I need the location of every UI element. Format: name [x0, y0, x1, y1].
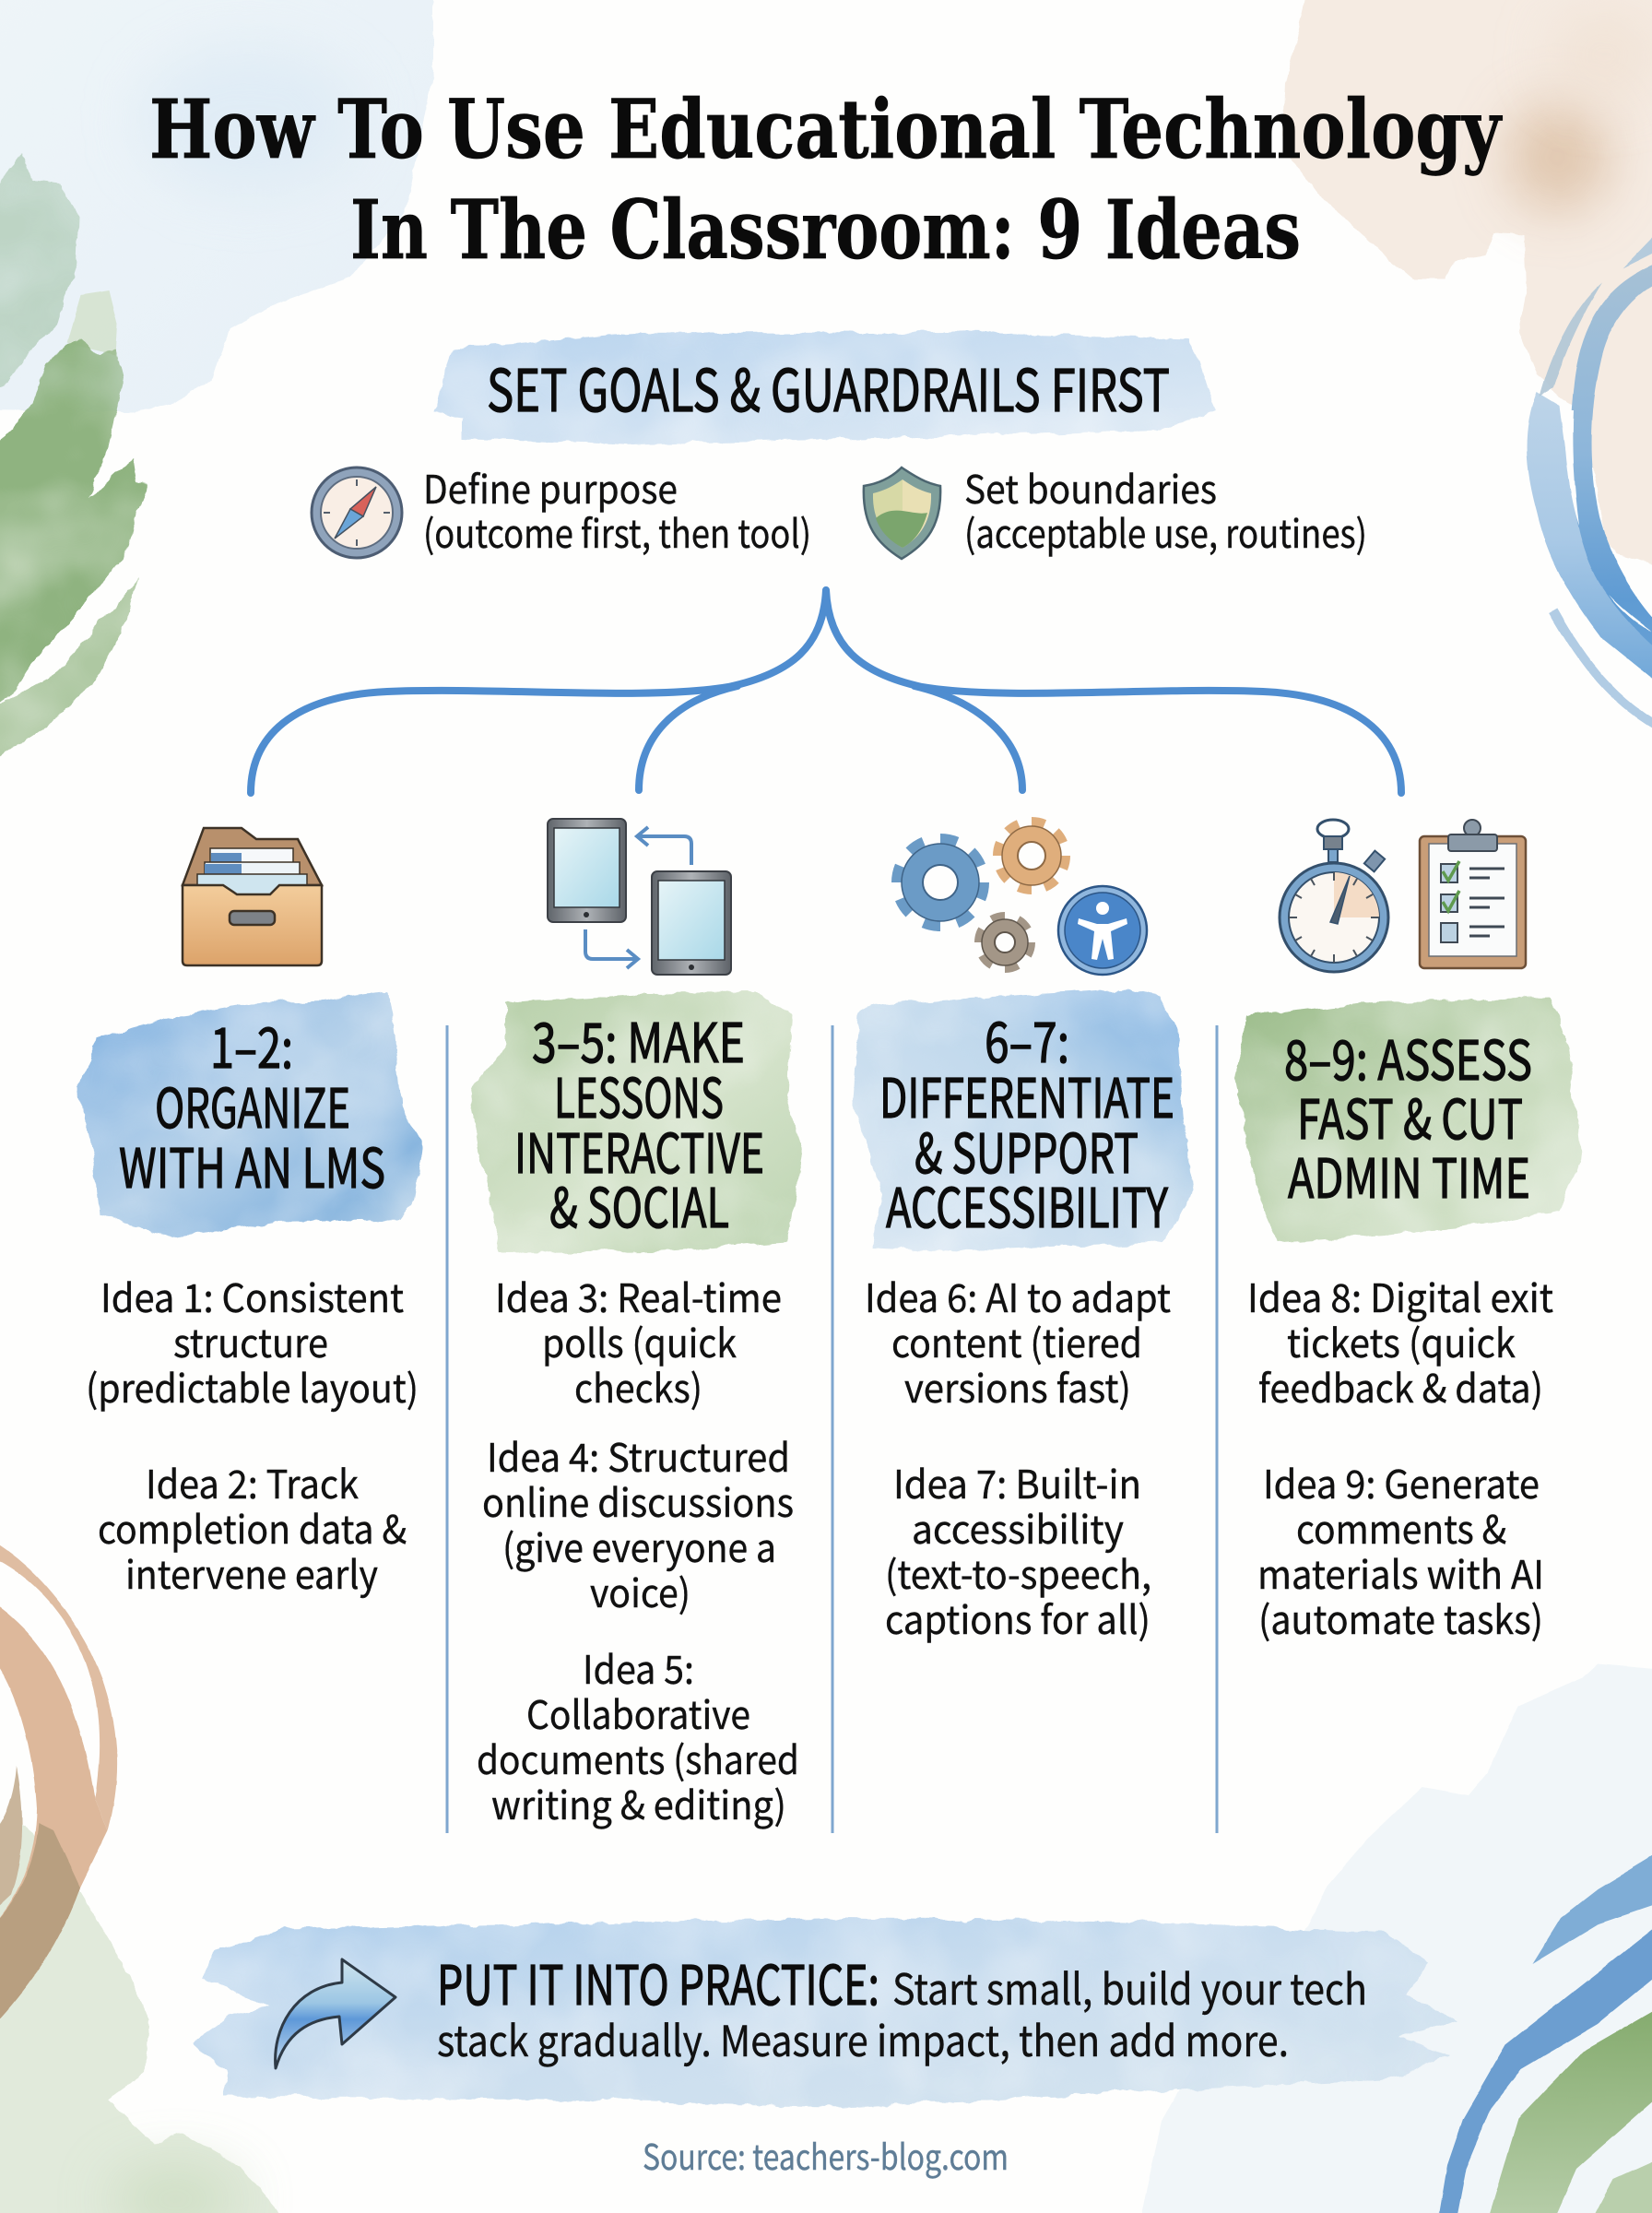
heading blob 1-2: 1–2:: [210, 1005, 293, 1083]
icon: file box: [183, 828, 322, 965]
background wash: top-left blue: [0, 0, 433, 412]
title: [149, 81, 1503, 278]
text: define purpose: Define purpose: [423, 459, 678, 515]
text: define purpose: (outcome first, then tool): [423, 503, 811, 560]
text: ideas 8 and 9: (automate tasks): [1258, 1590, 1543, 1646]
text: call to action: Start small, build your tech: [892, 1957, 1367, 2018]
text: ideas 6 and 7: content (tiered: [891, 1313, 1142, 1369]
text: ideas 1 and 2: (predictable layout): [86, 1358, 419, 1414]
heading blob 6-7: & SUPPORT: [914, 1110, 1139, 1189]
column dividers: [447, 1025, 1217, 1833]
panel: column 1 organize with an LMS: [77, 828, 423, 1601]
text: ideas 6 and 7: Idea 6: AI to adapt: [865, 1268, 1171, 1324]
text: ideas 1 and 2: structure: [173, 1313, 328, 1369]
text: ideas 8 and 9: feedback & data): [1258, 1358, 1543, 1414]
text: ideas 6 and 7: captions for all): [885, 1590, 1150, 1646]
text: ideas 6 and 7: accessibility: [912, 1499, 1124, 1556]
text: ideas 6 and 7: [865, 1268, 1171, 1646]
title: In The Classroom: 9 Ideas: [350, 182, 1301, 278]
text: ideas 3, 4 and 5: Idea 5:: [583, 1639, 694, 1696]
heading blob 1-2: WITH AN LMS: [119, 1125, 385, 1203]
panel: column 3 differentiate and support accessibility: [853, 822, 1194, 1646]
text: ideas 8 and 9: comments &: [1296, 1499, 1506, 1556]
heading blob 3-5: 3–5: MAKE: [532, 1000, 745, 1078]
text: ideas 6 and 7: versions fast): [904, 1358, 1131, 1414]
text: call to action: stack gradually. Measure impact, then add more.: [437, 2008, 1289, 2069]
heading blob 3-5: INTERACTIVE: [514, 1110, 764, 1189]
icon: clipboard checklist: [1420, 820, 1526, 968]
banner: set goals and guardrails first: [434, 332, 1217, 444]
text: ideas 1 and 2: intervene early: [125, 1544, 378, 1601]
panel: column 4 assess fast and cut admin time: [1234, 820, 1582, 1646]
text: call to action: PUT IT INTO PRACTICE:: [437, 1942, 879, 2020]
panel: column 2 make lessons interactive and social: [469, 819, 803, 1831]
heading blob 3-5: & SOCIAL: [549, 1165, 729, 1243]
text: ideas 6 and 7: Idea 7: Built-in: [893, 1454, 1141, 1510]
text: ideas 3, 4 and 5: [477, 1268, 799, 1831]
text: ideas 8 and 9: tickets (quick: [1287, 1313, 1516, 1369]
text: set boundaries: [964, 459, 1367, 560]
banner: put it into practice: [194, 1918, 1458, 2108]
text: call to action: [437, 1942, 1367, 2069]
text: ideas 3, 4 and 5: voice): [590, 1563, 690, 1619]
icon: stopwatch: [1280, 820, 1388, 972]
heading blob 8-9: 8–9: ASSESS: [1284, 1017, 1532, 1095]
heading blob 6-7: [853, 988, 1194, 1252]
icon: curved arrow: [276, 1959, 395, 2068]
text: set boundaries: (acceptable use, routines): [964, 503, 1367, 560]
heading blob 8-9: [1234, 998, 1582, 1243]
heading blob 6-7: 6–7:: [985, 1000, 1069, 1078]
brush strokes: bottom-left wash and brown arcs: [0, 1534, 286, 2213]
icon: gears and accessibility badge: [898, 822, 1147, 975]
icon: compass: [312, 467, 402, 558]
text: ideas 3, 4 and 5: Idea 3: Real-time: [495, 1268, 782, 1324]
connector: branching bracket: [251, 590, 1401, 793]
text: ideas 1 and 2: [86, 1268, 419, 1601]
text: ideas 3, 4 and 5: checks): [574, 1358, 702, 1414]
icon: shield: [864, 467, 940, 559]
text: set boundaries: Set boundaries: [964, 459, 1217, 515]
text: ideas 3, 4 and 5: polls (quick: [542, 1313, 737, 1369]
brush strokes: right blue arcs: [1527, 238, 1652, 733]
text: ideas 8 and 9: [1247, 1268, 1553, 1646]
text: ideas 8 and 9: Idea 9: Generate: [1263, 1454, 1540, 1510]
source line: Source: teachers-blog.com: [643, 2129, 1009, 2180]
text: ideas 3, 4 and 5: online discussions: [482, 1473, 794, 1529]
banner: set goals and guardrails first: SET GOALS & GUARDRAILS FIRST: [487, 345, 1170, 429]
text: ideas 1 and 2: Idea 1: Consistent: [100, 1268, 404, 1324]
text: ideas 1 and 2: completion data &: [98, 1499, 407, 1556]
background wash: top-right tan: [1283, 0, 1652, 569]
heading blob 3-5: LESSONS: [554, 1055, 724, 1133]
text: ideas 3, 4 and 5: Idea 4: Structured: [487, 1427, 790, 1484]
text: ideas 6 and 7: (text-to-speech,: [885, 1544, 1151, 1601]
icon: two tablets with sync arrows: [548, 819, 731, 975]
brush strokes: left green: [0, 154, 149, 770]
heading blob 1-2: [77, 991, 423, 1237]
text: ideas 8 and 9: materials with AI: [1257, 1544, 1544, 1601]
heading blob 8-9: FAST & CUT: [1297, 1076, 1523, 1154]
heading blob 3-5: [469, 993, 803, 1252]
text: define purpose: [423, 459, 811, 560]
heading blob 6-7: DIFFERENTIATE: [879, 1055, 1174, 1133]
heading blob 6-7: ACCESSIBILITY: [886, 1165, 1169, 1243]
heading blob 8-9: ADMIN TIME: [1288, 1135, 1530, 1213]
heading blob 1-2: ORGANIZE: [155, 1065, 350, 1143]
text: ideas 3, 4 and 5: Collaborative: [526, 1685, 750, 1741]
text: ideas 8 and 9: Idea 8: Digital exit: [1247, 1268, 1553, 1324]
text: ideas 1 and 2: Idea 2: Track: [146, 1454, 359, 1510]
brush strokes: bottom-right wash and arcs: [1138, 1663, 1652, 2213]
text: ideas 3, 4 and 5: writing & editing): [491, 1775, 786, 1831]
text: ideas 3, 4 and 5: (give everyone a: [502, 1518, 776, 1574]
text: ideas 3, 4 and 5: documents (shared: [477, 1730, 799, 1786]
